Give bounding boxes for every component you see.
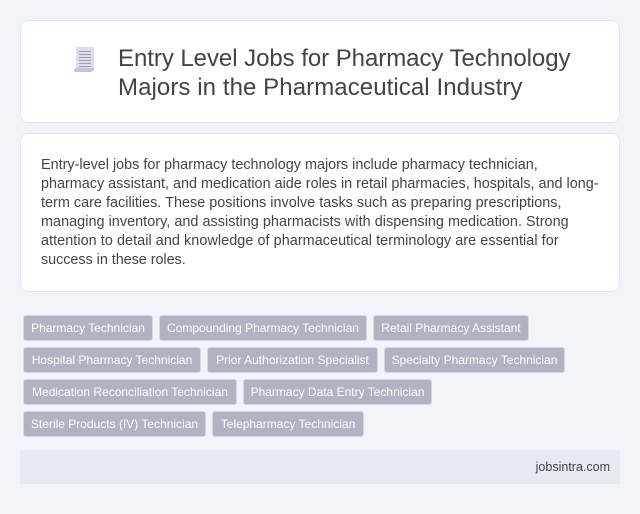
tag: Prior Authorization Specialist [216, 353, 369, 367]
tag: Sterile Products (IV) Technician [31, 417, 198, 431]
panel: header [20, 20, 620, 123]
tag [207, 347, 378, 373]
icon: document scroll [74, 47, 94, 72]
title: Majors in the Pharmaceutical Industry [118, 74, 522, 101]
footer bar [20, 450, 620, 484]
tag: Telepharmacy Technician [221, 417, 355, 431]
title: Entry Level Jobs for Pharmacy Technology [118, 45, 570, 72]
tag [23, 411, 206, 437]
description text: attention to detail and knowledge of pharmaceutical terminology are essential for [41, 233, 559, 249]
description text: success in these roles. [41, 252, 186, 268]
tag: Retail Pharmacy Assistant [381, 321, 521, 335]
tag [23, 347, 201, 373]
panel: description [20, 133, 620, 292]
tag [373, 315, 529, 341]
description text: managing inventory, and assisting pharmacists with dispensing medication. Strong [41, 214, 569, 230]
footer source text: jobsintra.com [536, 460, 610, 474]
description text: pharmacy assistant, and medication aide roles in retail pharmacies, hospitals, and long- [41, 176, 599, 192]
tag: Medication Reconciliation Technician [32, 385, 228, 399]
tag: Hospital Pharmacy Technician [32, 353, 192, 367]
tag: Pharmacy Data Entry Technician [251, 385, 424, 399]
tag [23, 315, 153, 341]
description text: term care facilities. These positions involve tasks such as preparing prescriptions, [41, 195, 562, 211]
tag: Specialty Pharmacy Technician [392, 353, 557, 367]
tag [243, 379, 432, 405]
description text [41, 157, 599, 268]
job tags [23, 315, 565, 437]
tag [384, 347, 565, 373]
tag [212, 411, 364, 437]
tag: Compounding Pharmacy Technician [167, 321, 359, 335]
tag: Pharmacy Technician [31, 321, 145, 335]
tag [159, 315, 367, 341]
description text: Entry-level jobs for pharmacy technology majors include pharmacy technician, [41, 157, 538, 173]
tag [23, 379, 237, 405]
title [118, 45, 570, 101]
